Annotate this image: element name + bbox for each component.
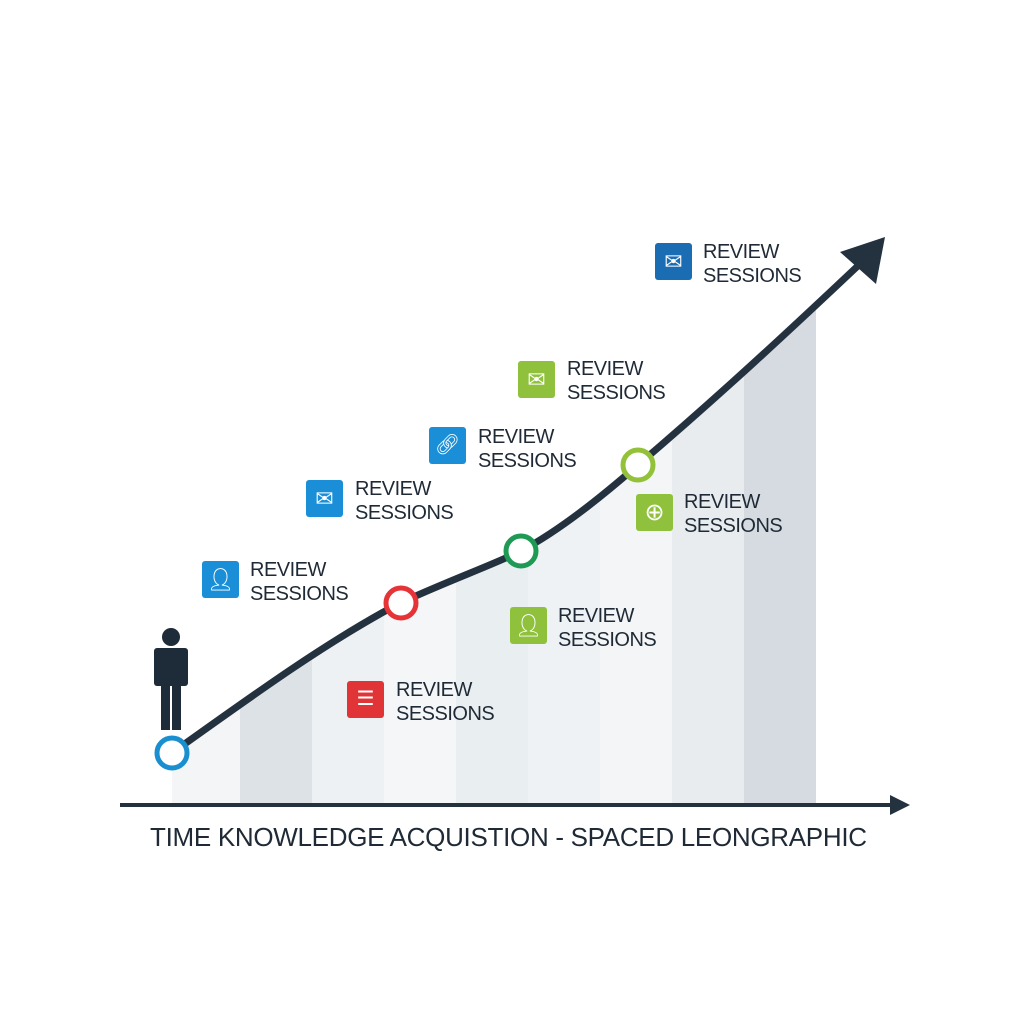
chart: [120, 237, 910, 815]
callout: review sessions (green mail): SESSIONS: [567, 382, 665, 404]
callout: review sessions (green target): REVIEW: [684, 491, 760, 513]
callout: review sessions (blue person): 👤︎: [207, 567, 234, 592]
callout: review sessions (blue envelope): ✉: [315, 486, 334, 511]
callout: review sessions (blue envelope): [306, 478, 453, 524]
callout: review sessions (blue link): 🔗︎: [435, 434, 460, 456]
callout: review sessions (green target): ⊕: [644, 499, 665, 526]
callout: review sessions (green mail): ✉: [527, 367, 546, 392]
callout: review sessions (green person): SESSIONS: [558, 629, 656, 651]
callout: review sessions (blue link): [429, 426, 576, 472]
callout: review sessions (blue envelope): SESSIONS: [355, 502, 453, 524]
callout: review sessions (green mail): REVIEW: [567, 358, 643, 380]
callout: review sessions (green target): SESSIONS: [684, 515, 782, 537]
callout: review sessions (green person): 👤︎: [515, 613, 542, 638]
bar chart: columns under curve: [172, 310, 816, 803]
callout: review sessions (blue link): SESSIONS: [478, 450, 576, 472]
milestone circles: [157, 450, 653, 768]
callout: review sessions (blue person): [202, 559, 348, 605]
callout: review sessions (green target): [636, 491, 782, 537]
callout: review sessions (top blue mail): REVIEW: [703, 241, 779, 263]
callout: review sessions (red doc): ☰: [357, 688, 374, 710]
callout: review sessions (red doc): SESSIONS: [396, 703, 494, 725]
callout: review sessions (top blue mail): [655, 241, 801, 287]
callout: review sessions (red doc): [347, 679, 494, 725]
callout: review sessions (green person): REVIEW: [558, 605, 634, 627]
x axis arrow: [120, 795, 910, 815]
callout: review sessions (blue person): SESSIONS: [250, 583, 348, 605]
callout: review sessions (blue link): REVIEW: [478, 426, 554, 448]
callout: review sessions (blue envelope): REVIEW: [355, 478, 431, 500]
callout: review sessions (red doc): REVIEW: [396, 679, 472, 701]
callout: review sessions (top blue mail): ✉: [664, 249, 683, 274]
growth curve arrow: [172, 237, 885, 753]
callout: review sessions (green person): [510, 605, 656, 651]
callout: review sessions (blue person): REVIEW: [250, 559, 326, 581]
callout: review sessions (green mail): [518, 358, 665, 404]
axis label: TIME KNOWLEDGE ACQUISTION - SPACED LEONGRAPHIC: [150, 822, 867, 852]
icon: person: [154, 628, 188, 730]
callout: review sessions (top blue mail): SESSIONS: [703, 265, 801, 287]
